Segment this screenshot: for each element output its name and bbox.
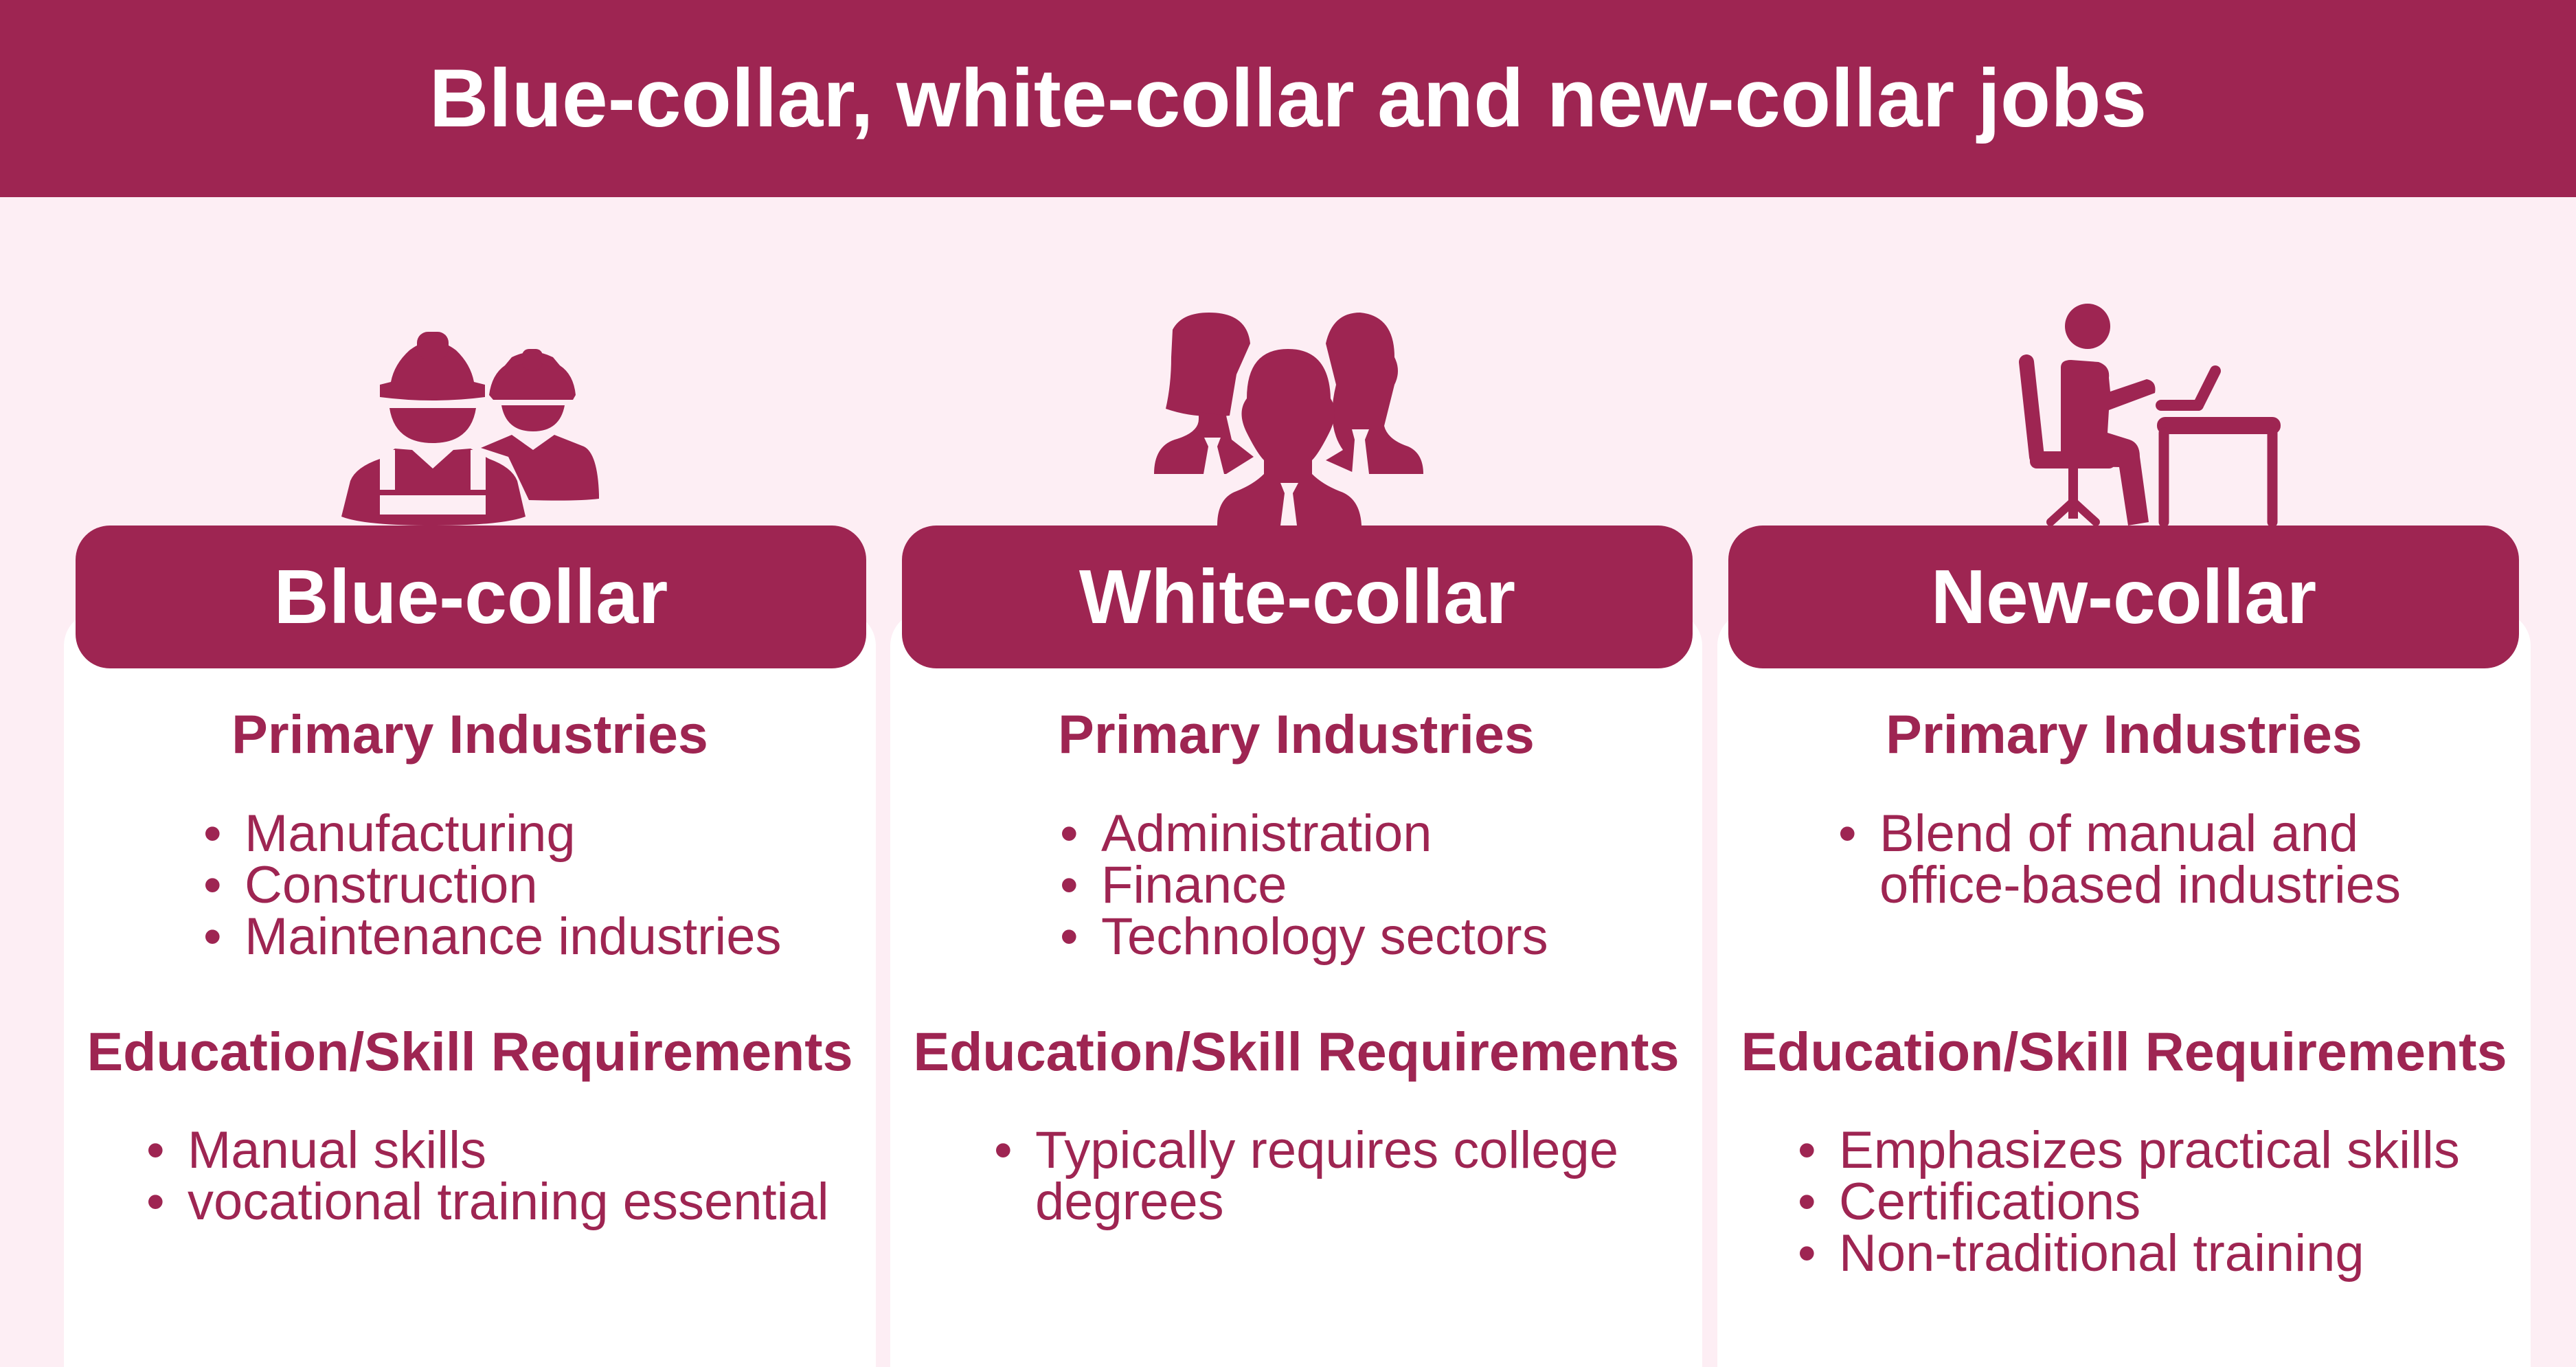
list: new education: Emphasizes practical skills (1839, 1121, 2460, 1179)
icon: construction workers (341, 304, 2281, 526)
list: blue education: vocational training essential (188, 1173, 829, 1231)
text: • (994, 1121, 1013, 1179)
list: white education: Typically requires college (1035, 1121, 1618, 1179)
text: • (1798, 1121, 1816, 1179)
list: blue education: Manual skills (188, 1121, 486, 1179)
text: • (1060, 907, 1078, 966)
list: blue education (146, 1121, 829, 1231)
pill: blue-collar: Blue-collar (274, 554, 668, 640)
list: new education: Non-traditional training (1839, 1224, 2364, 1283)
pill: white-collar: White-collar (1079, 554, 1515, 640)
panel: blue-collar (64, 611, 876, 1367)
pill: white-collar (902, 526, 1693, 668)
heading: blue education: Education/Skill Requirements (87, 1021, 853, 1082)
text: • (1060, 856, 1078, 914)
list: white education: degrees (1035, 1173, 1224, 1231)
text: • (203, 907, 222, 966)
list: new industries: Blend of manual and (1879, 804, 2358, 863)
list: white industries: Finance (1101, 856, 1287, 914)
title: Blue-collar, white-collar and new-collar jobs (429, 52, 2147, 144)
list: blue industries (203, 804, 782, 966)
list: white industries (1060, 804, 1548, 966)
icon: office workers (1154, 313, 1423, 526)
text: • (1798, 1224, 1816, 1283)
list: blue industries: Construction (245, 856, 538, 914)
text: • (1060, 804, 1078, 863)
list: new education: Certifications (1839, 1173, 2140, 1231)
list: white industries: Administration (1101, 804, 1432, 863)
text: • (1798, 1173, 1816, 1231)
text: • (146, 1121, 165, 1179)
pill: blue-collar (76, 526, 866, 668)
heading: new education: Education/Skill Requirements (1741, 1021, 2507, 1082)
text: • (203, 804, 222, 863)
title (0, 0, 2576, 197)
list: new industries: office-based industries (1879, 856, 2401, 914)
list: white education (994, 1121, 1618, 1231)
heading: white education: Education/Skill Requirements (913, 1021, 1680, 1082)
panel: new-collar (1717, 611, 2531, 1367)
list: blue industries: Manufacturing (245, 804, 576, 863)
heading: new primary industries: Primary Industries (1886, 703, 2362, 765)
text: • (146, 1173, 165, 1231)
text: • (203, 856, 222, 914)
list: white industries: Technology sectors (1101, 907, 1548, 966)
text: • (1838, 804, 1857, 863)
panel: white-collar (890, 611, 1702, 1367)
pill: new-collar: New-collar (1931, 554, 2316, 640)
icon: desk worker (2026, 304, 2281, 526)
list: new industries (1838, 804, 2401, 914)
list: new education (1798, 1121, 2460, 1283)
list: blue industries: Maintenance industries (245, 907, 782, 966)
pill: new-collar (1728, 526, 2519, 668)
heading: white primary industries: Primary Industries (1058, 703, 1535, 765)
heading: blue primary industries: Primary Industries (231, 703, 708, 765)
